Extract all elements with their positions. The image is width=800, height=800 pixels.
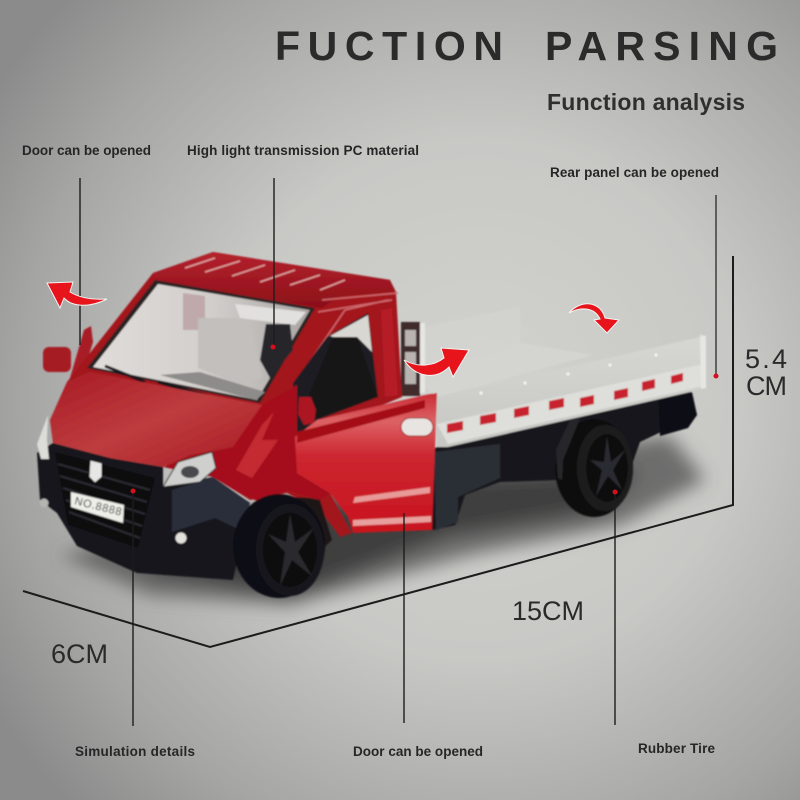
- black bumper and grille: [37, 443, 250, 580]
- left mirror: [43, 347, 71, 372]
- license plate: NO.8888: [73, 495, 123, 519]
- dimension: height: [745, 344, 787, 401]
- leader: door left: [79, 178, 81, 345]
- title: FUCTION: [275, 23, 503, 69]
- badge: [89, 460, 102, 483]
- roof ridges: [185, 258, 345, 290]
- subtitle: Function analysis: [547, 89, 745, 115]
- leader: rubber tire: [612, 490, 618, 725]
- dimension: length: 15CM: [512, 596, 584, 626]
- leader: rear panel: [714, 195, 718, 378]
- front fender: [163, 385, 330, 503]
- reflective stripes: [447, 373, 683, 433]
- dimension: height: CM: [746, 371, 787, 401]
- dimension lines: [23, 256, 733, 647]
- roof: [153, 252, 394, 308]
- side window and seat: [293, 308, 398, 440]
- windshield: [87, 280, 315, 403]
- left door: [70, 326, 93, 378]
- chassis: [432, 390, 697, 530]
- rear wheel: [555, 419, 633, 517]
- translucent bed side panel: [425, 307, 520, 386]
- leader: door bottom: [403, 513, 405, 723]
- arrow: left door: [47, 282, 107, 308]
- open door: [295, 393, 437, 533]
- left headlight: [37, 415, 49, 459]
- front wheel: [233, 494, 325, 598]
- title: [275, 23, 778, 69]
- wipers: [105, 366, 208, 396]
- right headlight: [163, 452, 216, 487]
- hood: [50, 372, 262, 467]
- cab body: [50, 252, 402, 537]
- door handle: [401, 418, 433, 436]
- interior seats: [160, 293, 306, 400]
- dimension: height: 5.4: [745, 344, 787, 374]
- fog lamps: [176, 532, 186, 544]
- cab rear frame: [401, 322, 425, 396]
- label: high light transmission: High light transmission PC material: [187, 143, 419, 158]
- arrow: cab door: [404, 348, 469, 377]
- title: PARSING: [545, 23, 778, 69]
- ground shadow: [60, 435, 705, 605]
- door mirror: [298, 397, 316, 425]
- bed floor: [424, 343, 593, 397]
- arrow: rear panel: [569, 304, 619, 333]
- label: door can be opened (bottom): Door can be opened: [353, 744, 483, 759]
- rear wheel arch: [556, 418, 580, 480]
- bed side panel: [437, 335, 706, 447]
- front wheel arch: [246, 497, 332, 570]
- truck: [37, 252, 706, 598]
- leader: simulation details: [130, 488, 136, 726]
- label: rear panel: Rear panel can be opened: [550, 165, 719, 180]
- label: rubber tire: Rubber Tire: [638, 741, 715, 756]
- label: door can be opened (left): Door can be opened: [22, 143, 151, 158]
- grille bars: [55, 452, 155, 548]
- leader: PC material: [270, 178, 276, 350]
- dimension: width: 6CM: [51, 639, 108, 669]
- door frame strips: [296, 293, 398, 382]
- label: simulation details: Simulation details: [75, 744, 195, 759]
